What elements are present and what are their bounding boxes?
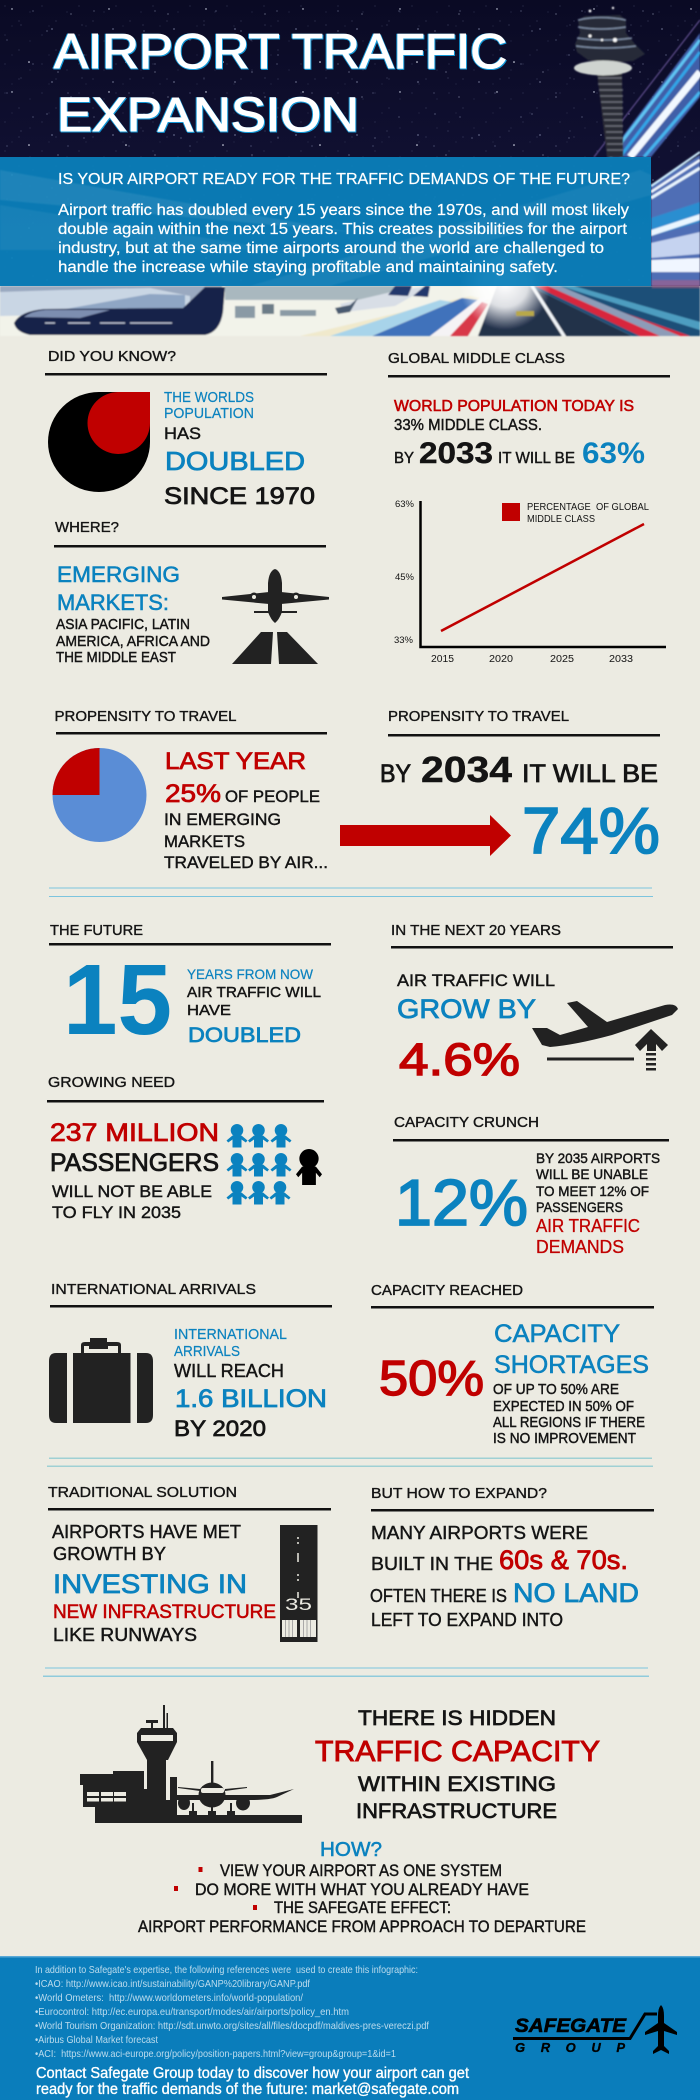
text block: WILL REACH (174, 1361, 284, 1381)
text block: PASSENGERS (50, 1149, 219, 1177)
text block: MARKETS: (57, 590, 169, 615)
text block: OFTEN THERE IS (370, 1586, 507, 1606)
text block: INTERNATIONAL (174, 1327, 287, 1343)
icon: runway 35: 35 (285, 1595, 312, 1614)
hidden capacity statement: THERE IS HIDDEN (358, 1706, 556, 1730)
icon: parked aircraft (14, 287, 225, 335)
icon: people grid (226, 1124, 292, 1204)
text block: 2034 (421, 749, 512, 790)
panel: the future (49, 923, 331, 1056)
text block (50, 1119, 219, 1222)
line chart: 2033 (609, 654, 633, 665)
icon: aircraft above runway (222, 569, 329, 664)
text block: SHORTAGES (494, 1351, 649, 1379)
line chart (394, 499, 666, 665)
line chart: 45% (395, 572, 415, 583)
text block (56, 562, 210, 666)
line chart: 2025 (550, 654, 574, 665)
panel: where (54, 520, 329, 666)
title: EXPANSION (57, 89, 359, 142)
text block: DEMANDS (536, 1237, 624, 1257)
panel: in the next 20 years (391, 923, 678, 1085)
chart legend (502, 502, 649, 525)
text block: BUILT IN THE (371, 1553, 493, 1574)
heading: BUT HOW TO EXPAND? (371, 1486, 547, 1502)
text block: 1.6 BILLION (175, 1385, 327, 1413)
lower light streaks (651, 152, 700, 286)
list items: DO MORE WITH WHAT YOU ALREADY HAVE (195, 1881, 529, 1899)
footer panel (0, 1956, 700, 2100)
references: •ICAO: http://www.icao.int/sustainability/GANP%20library/GANP.pdf (35, 1978, 310, 1990)
text block: NO LAND (513, 1578, 639, 1608)
text block: TO FLY IN 2035 (52, 1204, 181, 1222)
runway photo strip (0, 238, 700, 336)
text block: ARRIVALS (174, 1344, 240, 1360)
panel: capacity crunch (393, 1115, 669, 1257)
line chart: 63% (395, 499, 415, 510)
references: •World Tourism Organization: http://sdt.unwto.org/sites/all/files/docpdf/maldives-pres-vereczi.pdf (35, 2020, 429, 2032)
line chart: 2015 (431, 654, 454, 665)
text block: AIRPORTS HAVE MET (52, 1521, 241, 1542)
text block (174, 1327, 327, 1441)
text block: 60s & 70s. (499, 1545, 628, 1575)
icon: airport silhouette (80, 1705, 302, 1823)
list items: VIEW YOUR AIRPORT AS ONE SYSTEM (220, 1862, 502, 1880)
text block: HAVE (187, 1002, 231, 1019)
text block: GROW BY (397, 994, 536, 1024)
line chart: 2020 (489, 654, 513, 665)
text block: ASIA PACIFIC, LATIN (56, 617, 190, 633)
text block: DOUBLED (188, 1024, 301, 1047)
text block (164, 390, 315, 510)
logo: Safegate Group (513, 2005, 677, 2055)
text block: YEARS FROM NOW (187, 966, 314, 982)
text block: BY 2020 (174, 1416, 266, 1441)
header: night airport scene (0, 0, 700, 336)
icon: aircraft taking off (532, 1001, 678, 1070)
text block (394, 398, 645, 470)
heading: GROWING NEED (48, 1075, 175, 1091)
heading: INTERNATIONAL ARRIVALS (51, 1282, 256, 1298)
text block: MARKETS (164, 833, 245, 851)
title (54, 25, 507, 142)
text block: LIKE RUNWAYS (53, 1624, 197, 1645)
hidden capacity statement: WITHIN EXISTING (358, 1772, 556, 1796)
icon: suitcase (49, 1338, 153, 1423)
heading: WHERE? (55, 520, 119, 536)
text block: EXPECTED IN 50% OF (493, 1399, 634, 1415)
upper light streak (594, 20, 700, 157)
text block (380, 749, 658, 790)
big number: 12% (395, 1166, 528, 1239)
text block: 2033 (419, 437, 493, 470)
text block: 33% MIDDLE CLASS. (394, 417, 542, 434)
heading: PROPENSITY TO TRAVEL (54, 709, 236, 725)
text block: WORLD POPULATION TODAY IS (394, 398, 634, 415)
heading: TRADITIONAL SOLUTION (48, 1485, 237, 1501)
text block (397, 971, 555, 1085)
text block: LEFT TO EXPAND INTO (371, 1609, 563, 1630)
text block: BY 2035 AIRPORTS (536, 1150, 660, 1166)
heading: PROPENSITY TO TRAVEL (388, 709, 569, 725)
references: •World Ometers: http://www.worldometers.info/world-population/ (35, 1992, 303, 2004)
heading: DID YOU KNOW? (48, 349, 176, 365)
text block: AIR TRAFFIC WILL (187, 984, 321, 1001)
control tower (574, 7, 645, 157)
text block: POPULATION (164, 406, 254, 422)
text block: EMERGING (57, 562, 180, 587)
icon: population circles (48, 392, 150, 492)
text block: BY (380, 760, 411, 788)
text block: BY (394, 450, 414, 467)
list items: AIRPORT PERFORMANCE FROM APPROACH TO DEPARTURE (138, 1918, 586, 1936)
text block: DOUBLED (165, 446, 305, 476)
text block: TRAVELED BY AIR... (164, 854, 328, 872)
heading: CAPACITY CRUNCH (394, 1115, 539, 1131)
text block: GROWTH BY (53, 1543, 166, 1564)
text block: AIR TRAFFIC (536, 1216, 640, 1236)
text block (536, 1150, 660, 1257)
text block: SINCE 1970 (164, 483, 315, 510)
heading: IN THE NEXT 20 YEARS (391, 923, 561, 939)
heading: GLOBAL MIDDLE CLASS (388, 351, 565, 367)
references: •Airbus Global Market forecast (35, 2034, 158, 2046)
chart legend: PERCENTAGE OF GLOBAL (527, 502, 649, 513)
text block: IS NO IMPROVEMENT (493, 1431, 636, 1447)
banner paragraph (58, 202, 629, 276)
panel: how to expand (370, 1486, 654, 1630)
big number: 15 (63, 944, 172, 1056)
text block: 4.6% (399, 1034, 520, 1085)
arrow (340, 815, 511, 856)
list items (138, 1862, 586, 1936)
pie chart (52, 748, 146, 842)
text block: WILL NOT BE ABLE (52, 1183, 212, 1201)
logo: Safegate Group: SAFEGATE (515, 2016, 627, 2037)
panel: propensity to travel (last year) (52, 709, 328, 872)
heading: THE FUTURE (50, 923, 143, 939)
text block: INVESTING IN (53, 1569, 247, 1599)
panel: traditional solution (48, 1485, 331, 1645)
panel: capacity reached (371, 1283, 654, 1447)
text block (52, 1521, 276, 1645)
text block: AIR TRAFFIC WILL (397, 971, 555, 990)
panel: propensity to travel (2034) (340, 709, 660, 867)
text block: THE MIDDLE EAST (56, 650, 176, 666)
banner paragraph: handle the increase while staying profitable and maintaining safety. (58, 259, 558, 276)
text block: TO MEET 12% OF (536, 1183, 649, 1199)
text block (164, 748, 328, 872)
text block: ALL REGIONS IF THERE (493, 1415, 645, 1431)
icon: black person (296, 1149, 322, 1185)
heading: HOW? (320, 1839, 382, 1861)
contact call to action: Contact Safegate Group today to discover how your airport can get (36, 2065, 470, 2082)
banner heading: IS YOUR AIRPORT READY FOR THE TRAFFIC DEMANDS OF THE FUTURE? (58, 171, 630, 188)
hidden capacity statement: INFRASTRUCTURE (356, 1799, 557, 1823)
panel: growing need (47, 1075, 324, 1222)
contact call to action: ready for the traffic demands of the future: market@safegate.com (36, 2081, 459, 2098)
panel: international arrivals (49, 1282, 332, 1441)
text block: HAS (164, 424, 201, 443)
references (35, 1964, 429, 2060)
text block (187, 966, 321, 1047)
hidden capacity statement (315, 1706, 600, 1823)
references: •ACI: https://www.aci-europe.org/policy/position-papers.html?view=group&group=1&id=1 (35, 2048, 396, 2060)
banner paragraph: double again within the next 15 years. This creates possibilities for the airport (58, 221, 628, 238)
big number: 50% (379, 1352, 484, 1406)
banner paragraph: industry, but at the same time airports around the world are challenged to (58, 240, 604, 257)
panel: did you know (45, 349, 327, 510)
text block: NEW INFRASTRUCTURE (53, 1602, 276, 1623)
contact call to action (36, 2065, 470, 2098)
text block: 63% (582, 437, 645, 470)
text block: OF UP TO 50% ARE (493, 1382, 619, 1398)
text block: PASSENGERS (536, 1199, 623, 1215)
hidden capacity statement: TRAFFIC CAPACITY (315, 1736, 600, 1768)
how list (138, 1839, 586, 1936)
text block: 25% (165, 780, 221, 808)
text block: IN EMERGING (164, 811, 281, 829)
panel: global middle class (388, 351, 670, 665)
icon: runway 35 (280, 1525, 318, 1642)
text block (493, 1320, 649, 1447)
title: AIRPORT TRAFFIC (54, 25, 507, 79)
text block: OF PEOPLE (225, 788, 320, 806)
text block: MANY AIRPORTS WERE (371, 1522, 588, 1543)
banner paragraph: Airport traffic has doubled every 15 years since the 1970s, and will most likely (58, 202, 629, 219)
text block: WILL BE UNABLE (536, 1166, 648, 1182)
text block: 237 MILLION (50, 1119, 219, 1147)
text block: LAST YEAR (165, 748, 306, 775)
text block (370, 1522, 639, 1630)
line chart: 33% (394, 635, 414, 646)
text block: CAPACITY (494, 1320, 620, 1348)
heading: CAPACITY REACHED (371, 1283, 523, 1299)
big number: 74% (522, 794, 660, 867)
logo: Safegate Group: G R O U P (515, 2040, 625, 2055)
intro banner (0, 157, 651, 286)
text block: IT WILL BE (522, 760, 658, 788)
text block: IT WILL BE (498, 450, 575, 467)
references: In addition to Safegate's expertise, the following references were used to create this infographic: (35, 1964, 418, 1976)
text block: AMERICA, AFRICA AND (56, 634, 210, 650)
list items: THE SAFEGATE EFFECT: (274, 1899, 451, 1917)
references: •Eurocontrol: http://ec.europa.eu/transport/modes/air/airports/policy_en.htm (35, 2006, 349, 2018)
chart legend: MIDDLE CLASS (527, 514, 595, 525)
text block: THE WORLDS (164, 390, 254, 406)
